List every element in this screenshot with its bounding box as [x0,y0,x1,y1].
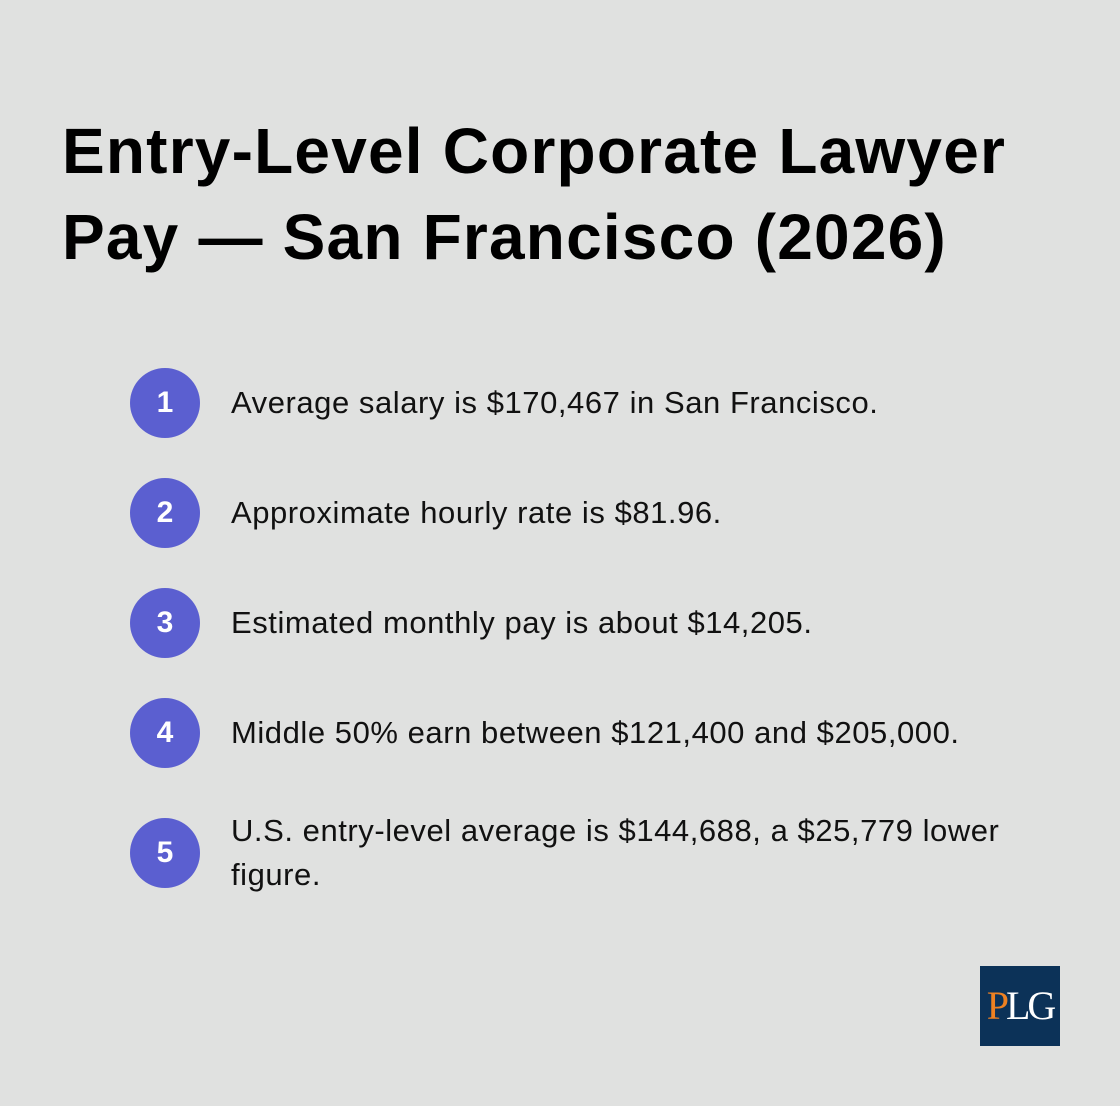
item 2: 2 [157,496,173,529]
item 4 [130,698,960,768]
logo: PLG: PLG [987,983,1053,1028]
item 1: 1 [157,386,173,419]
item 5: 5 [157,836,173,869]
item 3 [130,588,813,658]
title: Entry-Level Corporate Lawyer [62,115,1006,187]
item 4: 4 [157,716,173,749]
item 2 [130,478,722,548]
item 2: Approximate hourly rate is $81.96. [231,495,722,530]
logo: PLG [980,966,1060,1046]
item 3: 3 [157,606,173,639]
item 5: U.S. entry-level average is $144,688, a $25,779 lower figure. [231,813,999,892]
item 4: Middle 50% earn between $121,400 and $205,000. [231,715,960,750]
item 3: Estimated monthly pay is about $14,205. [231,605,813,640]
item 1 [130,368,878,438]
title: Pay — San Francisco (2026) [62,201,947,273]
item 1: Average salary is $170,467 in San Francisco. [231,385,878,420]
title [62,115,1006,273]
